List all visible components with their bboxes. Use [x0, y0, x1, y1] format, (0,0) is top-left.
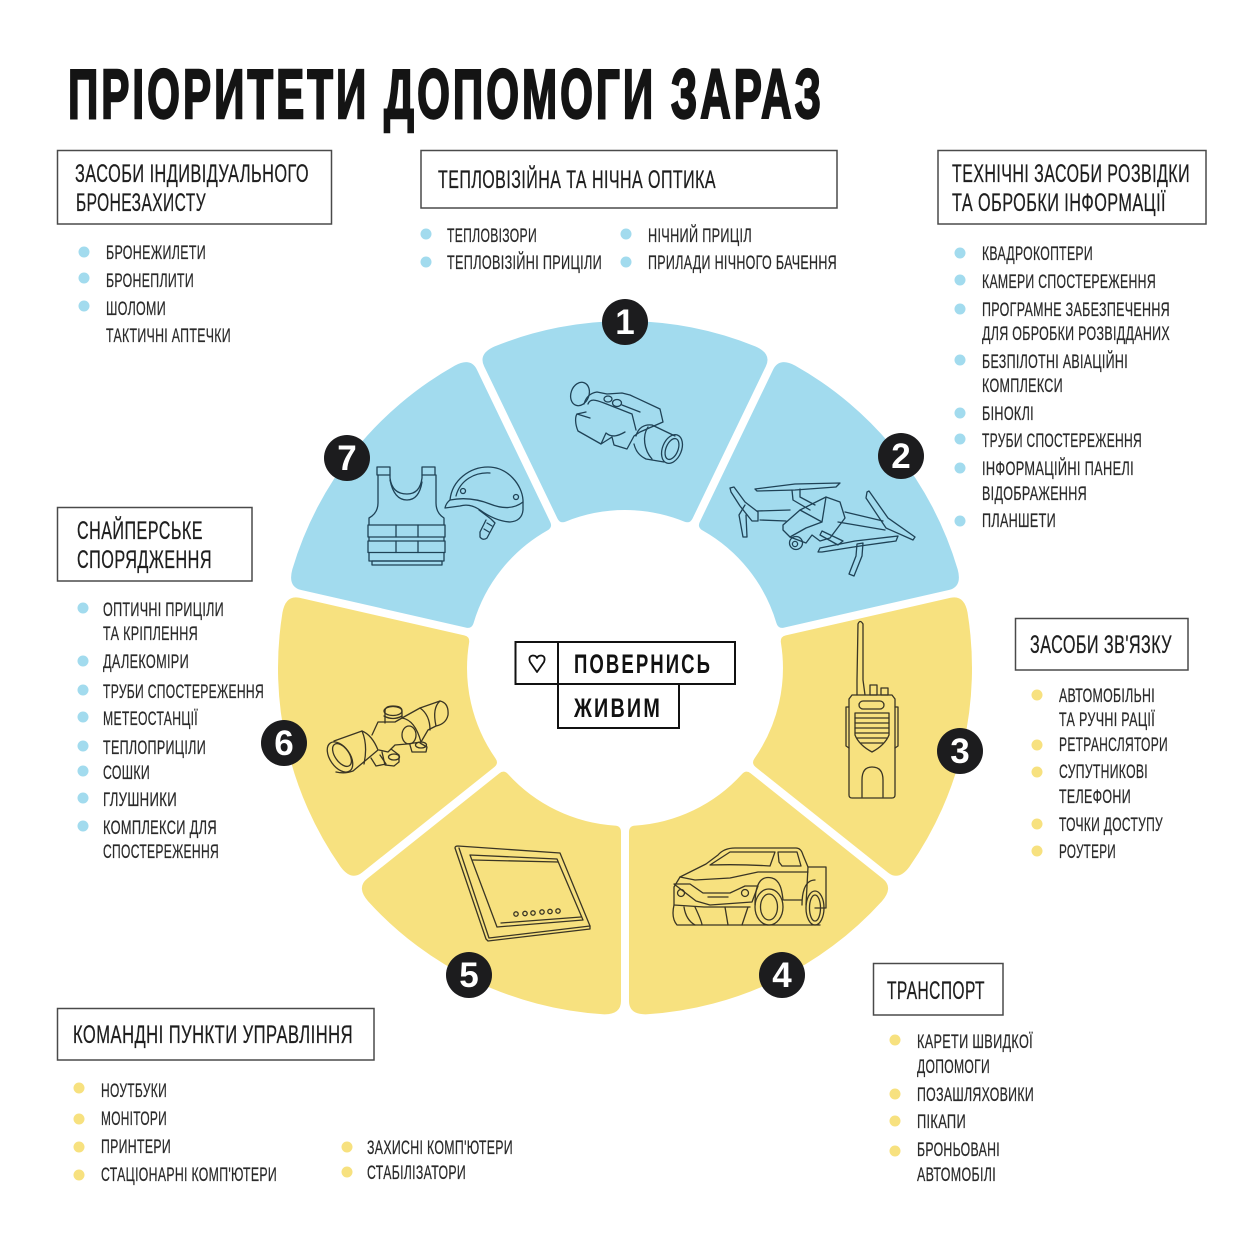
number badge 1 [602, 299, 648, 345]
list: reconnaissance items: ПЛАНШЕТИ [982, 510, 1056, 532]
list: optics items: ПРИЛАДИ НІЧНОГО БАЧЕННЯ [648, 252, 837, 274]
number badge 3: 3 [950, 732, 970, 771]
list: optics items: НІЧНИЙ ПРИЦІЛ [648, 223, 752, 247]
heading box: armor: БРОНЕЗАХИСТУ [76, 189, 206, 217]
list: sniper items: ТА КРІПЛЕННЯ [103, 623, 198, 645]
heading box: command posts [58, 1008, 374, 1060]
panel: thermal and night optics [420, 150, 837, 274]
heading box: sniper: СПОРЯДЖЕННЯ [77, 546, 212, 574]
list: sniper items [78, 599, 264, 863]
number badge 7: 7 [337, 439, 357, 478]
list: optics items: ТЕПЛОВІЗОРИ [447, 225, 537, 247]
wheel segment 5: command posts [346, 737, 690, 1042]
list: sniper items: МЕТЕОСТАНЦІЇ [103, 708, 198, 730]
number badge 2 [878, 433, 924, 479]
list: sniper items: ДАЛЕКОМІРИ [103, 651, 189, 673]
list: armor items: ТАКТИЧНІ АПТЕЧКИ [106, 325, 231, 347]
list: reconnaissance items: ІНФОРМАЦІЙНІ ПАНЕЛІ [982, 456, 1134, 480]
heading box: sniper [58, 508, 252, 581]
list: sniper items: КОМПЛЕКСИ ДЛЯ [103, 817, 217, 839]
panel: communications [1016, 618, 1188, 863]
list: reconnaissance items: КВАДРОКОПТЕРИ [982, 243, 1093, 265]
number badge 5 [446, 952, 492, 998]
logo: Повернись живим: ЖИВИМ [573, 693, 662, 723]
list: transport items: ДОПОМОГИ [917, 1056, 990, 1078]
number badge 4 [759, 952, 805, 998]
logo: Повернись живим [516, 642, 735, 728]
list: armor items: ШОЛОМИ [106, 298, 166, 320]
logo: Повернись живим: ПОВЕРНИСЬ [574, 649, 712, 679]
list: armor items: БРОНЕЖИЛЕТИ [106, 242, 206, 264]
list: transport items: АВТОМОБІЛІ [917, 1164, 996, 1186]
list: reconnaissance items: БІНОКЛІ [982, 403, 1034, 425]
icon: radio [846, 622, 898, 798]
panel: sniper equipment [58, 508, 264, 863]
number badge 1: 1 [615, 303, 635, 342]
list: communications items [1032, 685, 1168, 863]
panel: command posts [58, 1008, 513, 1186]
list: armor items: БРОНЕПЛИТИ [106, 270, 194, 292]
heading box: optics [421, 150, 837, 208]
list: sniper items: СПОСТЕРЕЖЕННЯ [103, 841, 219, 863]
list: reconnaissance items: ВІДОБРАЖЕННЯ [982, 483, 1087, 505]
wheel segment 3: communications [735, 561, 995, 884]
heading box: sniper: СНАЙПЕРСЬКЕ [77, 515, 203, 545]
list: reconnaissance items: ТРУБИ СПОСТЕРЕЖЕННЯ [982, 430, 1142, 452]
number badge 3 [937, 728, 983, 774]
list: command post items: ЗАХИСНІ КОМП'ЮТЕРИ [367, 1137, 513, 1159]
wheel segment 2: reconnaissance [650, 340, 985, 689]
panel: transport [874, 964, 1034, 1186]
list: command post items: СТАБІЛІЗАТОРИ [367, 1162, 466, 1184]
list: command post items: МОНІТОРИ [101, 1108, 167, 1130]
list: armor items [78, 242, 231, 347]
list: communications items: АВТОМОБІЛЬНІ [1059, 685, 1155, 707]
wheel segment 6: sniper equipment [255, 561, 515, 884]
list: communications items: РОУТЕРИ [1059, 841, 1116, 863]
list: sniper items: СОШКИ [103, 762, 150, 784]
list: reconnaissance items: КОМПЛЕКСИ [982, 375, 1063, 397]
panel: reconnaissance technology [938, 150, 1206, 532]
icon: pickup truck [673, 848, 826, 925]
icon: drone [730, 483, 915, 576]
icon: monitor [455, 846, 590, 941]
list: command post items [74, 1080, 513, 1186]
number badge 6 [261, 720, 307, 766]
heading box: armor [58, 150, 332, 224]
list: communications items: ТА РУЧНІ РАЦІЇ [1059, 709, 1155, 731]
heading box: command posts: КОМАНДНІ ПУНКТИ УПРАВЛІННЯ [73, 1021, 353, 1049]
heading box: armor: ЗАСОБИ ІНДИВІДУАЛЬНОГО [75, 160, 309, 188]
number badge 6: 6 [274, 724, 294, 763]
number badge 5: 5 [459, 956, 479, 995]
icon: body armor and helmet [368, 467, 523, 565]
number badge 4: 4 [772, 956, 792, 995]
list: transport items [890, 1031, 1034, 1186]
list: communications items: СУПУТНИКОВІ [1059, 761, 1148, 783]
priority wheel [255, 299, 995, 1042]
list: optics items [420, 223, 837, 274]
list: command post items: СТАЦІОНАРНІ КОМП'ЮТЕРИ [101, 1164, 277, 1186]
icon: heart [529, 656, 545, 672]
list: sniper items: ГЛУШНИКИ [103, 789, 177, 811]
heading box: reconnaissance [938, 150, 1206, 224]
list: command post items: НОУТБУКИ [101, 1080, 167, 1102]
list: transport items: ПОЗАШЛЯХОВИКИ [917, 1084, 1034, 1106]
list: sniper items: ТЕПЛОПРИЦІЛИ [103, 737, 206, 759]
panel: individual armor protection [58, 150, 332, 347]
heading box: transport: ТРАНСПОРТ [887, 977, 985, 1005]
list: transport items: КАРЕТИ ШВИДКОЇ [917, 1031, 1033, 1053]
heading box: transport [874, 964, 1003, 1015]
list: transport items: БРОНЬОВАНІ [917, 1139, 1000, 1161]
heading box: optics: ТЕПЛОВІЗІЙНА ТА НІЧНА ОПТИКА [438, 164, 716, 194]
list: sniper items: ТРУБИ СПОСТЕРЕЖЕННЯ [103, 681, 264, 703]
list: command post items: ПРИНТЕРИ [101, 1136, 171, 1158]
list: communications items: ТОЧКИ ДОСТУПУ [1059, 814, 1163, 836]
wheel segment 4: transport [560, 737, 904, 1042]
list: communications items: РЕТРАНСЛЯТОРИ [1059, 734, 1168, 756]
heading box: communications: ЗАСОБИ ЗВ'ЯЗКУ [1030, 631, 1172, 659]
wheel segment 7: armor [265, 340, 600, 689]
list: communications items: ТЕЛЕФОНИ [1059, 786, 1131, 808]
icon: rifle scope [322, 701, 448, 777]
icon: thermal monocular [567, 380, 686, 466]
list: reconnaissance items [954, 243, 1170, 532]
heading box: communications [1016, 618, 1188, 670]
list: sniper items: ОПТИЧНІ ПРИЦІЛИ [103, 599, 224, 621]
wheel segment 1: thermal optics [482, 321, 768, 522]
list: transport items: ПІКАПИ [917, 1111, 966, 1133]
list: optics items: ТЕПЛОВІЗІЙНІ ПРИЦІЛИ [447, 250, 602, 274]
number badge 7 [324, 435, 370, 481]
number badge 2: 2 [891, 437, 911, 476]
list: reconnaissance items: БЕЗПІЛОТНІ АВІАЦІЙНІ [982, 349, 1128, 373]
